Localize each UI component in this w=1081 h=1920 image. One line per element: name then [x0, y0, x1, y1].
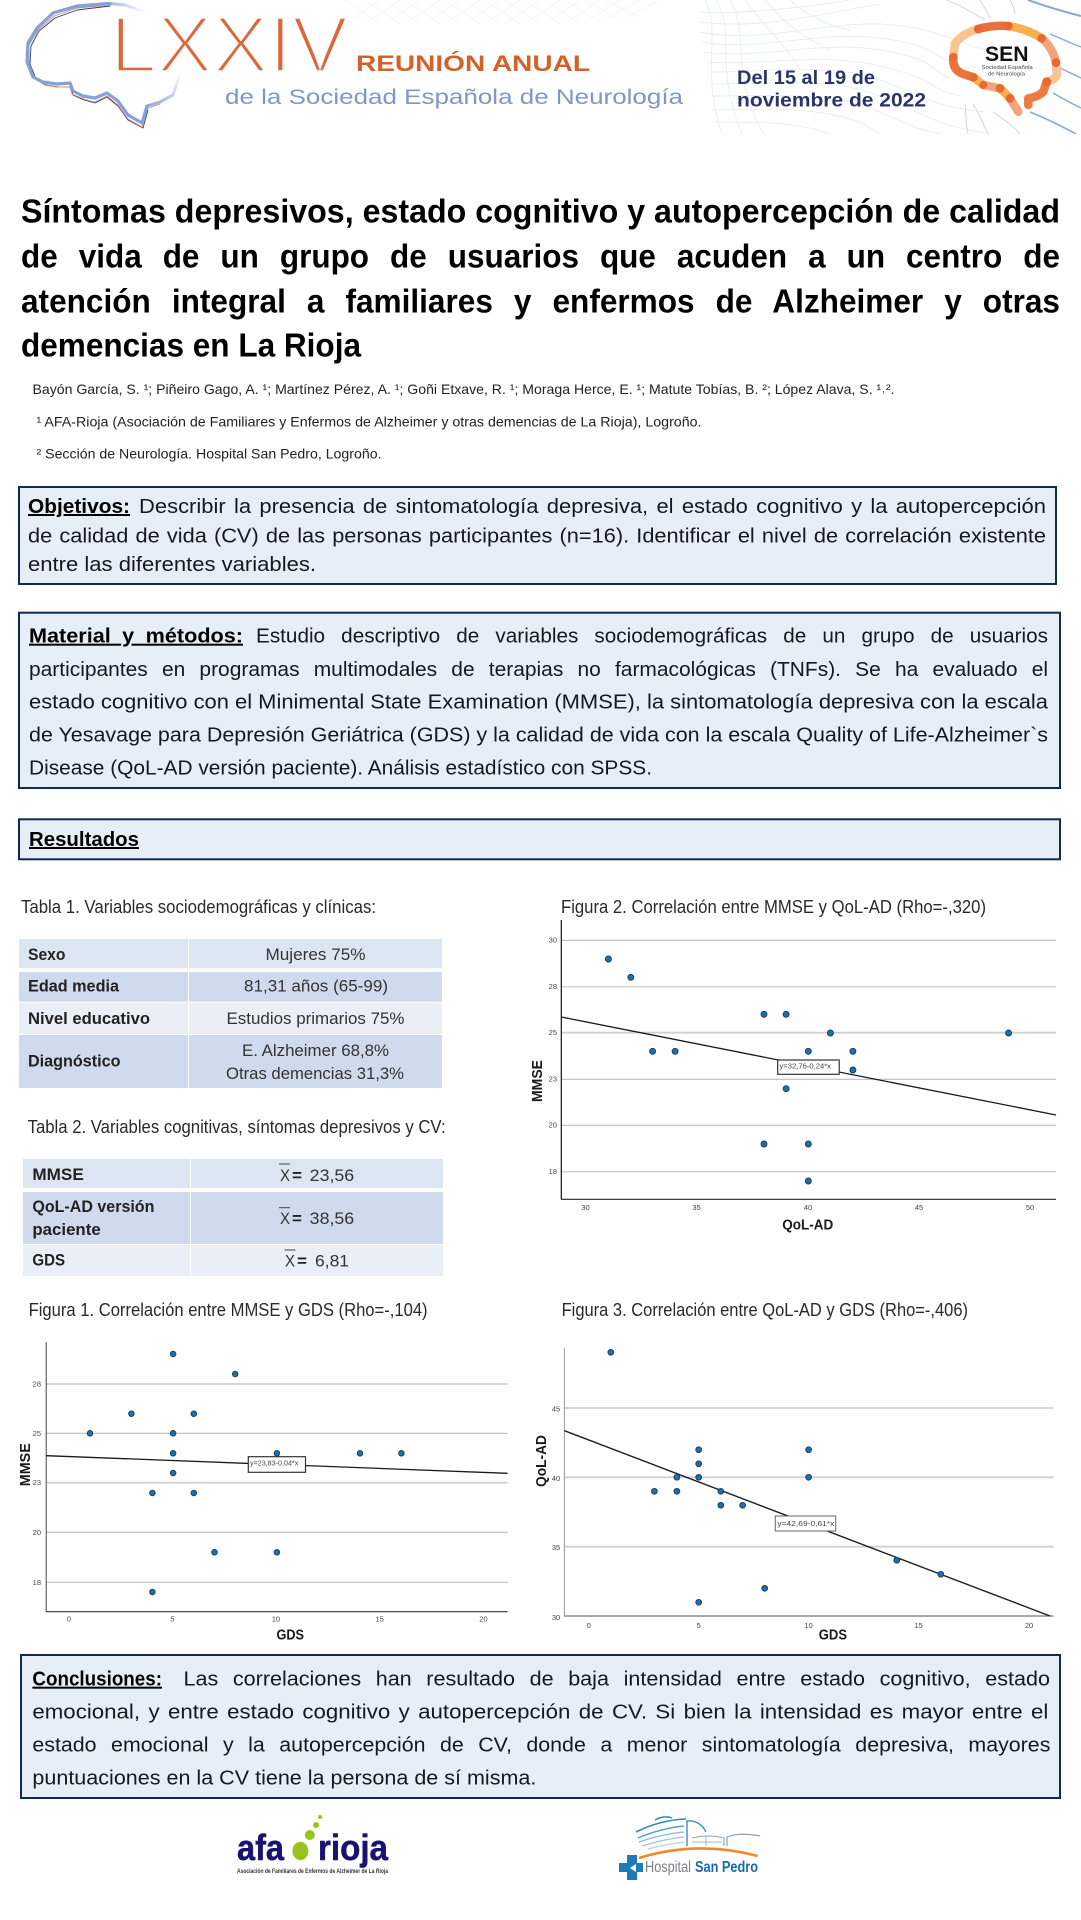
table 2: GDS [32, 1251, 65, 1270]
panel: material y métodos: de Yesavage para Depresión Geriátrica (GDS) y la calidad de vida con la escala Quality of Life-Alzheimer`s [29, 724, 1048, 746]
panel: material y métodos: Material y métodos: [29, 626, 243, 648]
chart: figura 3 scatter: 15 [914, 1621, 923, 1630]
equation label: y=32,76-0,24*x [780, 1062, 831, 1070]
panel: conclusiones: Las correlaciones han resultado de baja intensidad entre estado cognitivo, estado [184, 1669, 1050, 1691]
icon: brain speech outline [27, 4, 180, 128]
chart: figura 2 scatter: 35 [692, 1203, 701, 1212]
panel: resultados heading [19, 819, 1060, 859]
heading: Reunión Anual: REUNIÓN ANUAL [356, 51, 590, 76]
chart: figura 2 scatter: 18 [549, 1167, 557, 1176]
panel: conclusiones: emocional, y entre estado cognitivo y autopercepción de CV. Si bien la intensidad es mayor entre el [32, 1702, 1048, 1724]
table 2: MMSE [32, 1165, 84, 1184]
chart: figura 1 scatter: 0 [67, 1615, 71, 1624]
title: demencias en La Rioja [21, 328, 361, 365]
caption: figura 3: Figura 3. Correlación entre QoL-AD y GDS (Rho=-,406) [562, 1299, 968, 1320]
table 1: E. Alzheimer 68,8% [242, 1041, 389, 1060]
authors and affiliations: ² Sección de Neurología. Hospital San Pedro, Logroño. [36, 446, 382, 462]
chart: figura 2 scatter [530, 920, 1056, 1233]
panel: conclusiones [21, 1655, 1060, 1798]
trend line [564, 1431, 1050, 1616]
data points [605, 956, 1012, 1184]
chart: figura 1 scatter: 25 [33, 1429, 41, 1438]
logo: AFA Rioja: afa [237, 1827, 285, 1868]
chart: figura 3 scatter: 30 [552, 1613, 560, 1622]
data points [608, 1349, 944, 1605]
panel: resultados heading: Resultados [29, 829, 139, 851]
panel: objetivos: de calidad de vida (CV) de las personas participantes (n=16). Identificar el nivel de correlación existente [28, 526, 1046, 548]
panel: conclusiones: puntuaciones en la CV tiene la persona de sí misma. [32, 1767, 536, 1789]
caption: tabla 1: Tabla 1. Variables sociodemográficas y clínicas: [21, 896, 376, 917]
chart: figura 3 scatter: 5 [697, 1621, 701, 1630]
authors and affiliations [32, 381, 894, 462]
table 2: = [292, 1209, 302, 1228]
table 2 [23, 1159, 443, 1276]
logo: Hospital San Pedro: San Pedro [695, 1859, 758, 1876]
x-axis label: QoL-AD [782, 1217, 833, 1233]
table 1: Otras demencias 31,3% [226, 1064, 404, 1083]
logo: Hospital San Pedro: Hospital [645, 1859, 691, 1876]
equation label: y=42,69-0,61*x [777, 1519, 835, 1528]
caption: figura 1: Figura 1. Correlación entre MMSE y GDS (Rho=-,104) [29, 1299, 428, 1320]
chart: figura 2 scatter: 30 [581, 1203, 590, 1212]
table 1: 81,31 años (65-99) [244, 977, 388, 996]
panel: material y métodos: Disease (QoL-AD versión paciente). Análisis estadístico con SPSS. [29, 757, 652, 779]
chart: figura 3 scatter: 10 [804, 1621, 813, 1630]
x-axis label: GDS [819, 1627, 847, 1643]
chart: figura 3 scatter: 0 [587, 1621, 591, 1630]
chart: figura 1 scatter: 5 [170, 1615, 174, 1624]
trend line [561, 1017, 1056, 1115]
chart: figura 1 scatter: 23 [33, 1478, 41, 1487]
chart: figura 1 scatter [18, 1342, 508, 1643]
table 1: Mujeres 75% [266, 945, 366, 964]
table 1: Diagnóstico [28, 1052, 120, 1071]
table 2: = [292, 1166, 302, 1185]
trend line [46, 1456, 508, 1473]
panel: objetivos [19, 487, 1056, 584]
logo: AFA Rioja: Asociación de Familiares de Enfermos de Alzheimer de La Rioja [237, 1869, 389, 1875]
caption: tabla 2: Tabla 2. Variables cognitivas, síntomas depresivos y CV: [28, 1116, 446, 1137]
chart: figura 2 scatter: 20 [549, 1120, 557, 1130]
header banner [27, 0, 1081, 134]
panel: conclusiones: Conclusiones: [32, 1669, 162, 1691]
heading: LXXIV: LXXIV [110, 0, 349, 89]
chart: figura 2 scatter: 30 [549, 936, 557, 944]
x-axis label: GDS [276, 1627, 304, 1643]
dates: Del 15 al 19 de [737, 68, 875, 89]
chart: figura 1 scatter: 18 [33, 1578, 41, 1587]
table 1: Sexo [28, 945, 66, 964]
panel: conclusiones: estado emocional y la autopercepción de CV, donde a menor sintomatología depresiva, mayores [32, 1735, 1050, 1757]
dates [737, 68, 926, 112]
authors and affiliations: ¹ AFA-Rioja (Asociación de Familiares y Enfermos de Alzheimer y otras demencias de La Rioja), Logroño. [36, 414, 702, 430]
y-axis label: MMSE [18, 1443, 34, 1486]
icon: SEN logo: Sociedad Española [982, 65, 1034, 71]
panel: material y métodos: estado cognitivo con el Minimental State Examination (MMSE), la sintomatología depresiva con la escala [29, 691, 1049, 713]
chart: figura 3 scatter: 40 [552, 1474, 560, 1483]
table 2: = [297, 1252, 307, 1271]
dates: noviembre de 2022 [737, 91, 926, 112]
panel: objetivos: entre las diferentes variables. [28, 554, 316, 576]
chart: figura 1 scatter: 15 [376, 1615, 384, 1624]
chart: figura 2 scatter: 50 [1026, 1203, 1034, 1212]
title [21, 194, 1060, 365]
logo: AFA Rioja [237, 1815, 389, 1875]
panel: material y métodos: participantes en programas multimodales de terapias no farmacológicas (TNFs). Se ha evaluado el [29, 659, 1048, 681]
chart: figura 2 scatter: 25 [549, 1028, 557, 1037]
table 2: 23,56 [310, 1166, 354, 1185]
chart: figura 3 scatter: 35 [552, 1543, 560, 1552]
authors and affiliations: Bayón García, S. ¹; Piñeiro Gago, A. ¹; Martínez Pérez, A. ¹; Goñi Etxave, R. ¹; Moraga Herce, E. ¹; Matute Tobías, B. ²; López Alava, S. ¹˒². [32, 381, 894, 397]
table 1: Nivel educativo [28, 1009, 150, 1028]
equation label: y=23,83-0,04*x [250, 1459, 299, 1468]
title: Síntomas depresivos, estado cognitivo y autopercepción de calidad [21, 194, 1060, 231]
table 2: QoL-AD versión [32, 1197, 154, 1216]
icon: SEN logo: SEN [985, 42, 1028, 66]
chart: figura 1 scatter: 28 [33, 1380, 41, 1388]
panel: objetivos: Describir la presencia de sintomatología depresiva, el estado cognitivo y la autopercepción [139, 496, 1046, 518]
panel: material y métodos: Estudio descriptivo de variables sociodemográficas de un grupo de usuarios [256, 626, 1048, 648]
chart: figura 2 scatter: 45 [915, 1203, 923, 1212]
table 2: X [280, 1209, 290, 1228]
chart: figura 3 scatter: 45 [552, 1405, 560, 1414]
chart: figura 1 scatter: 10 [272, 1615, 280, 1624]
chart: figura 1 scatter: 20 [479, 1615, 488, 1624]
data points [87, 1351, 404, 1595]
y-axis label: QoL-AD [534, 1435, 550, 1487]
subheading: society: de la Sociedad Española de Neurología [225, 86, 683, 109]
table 2: X [280, 1166, 290, 1185]
table 1: Edad media [28, 977, 120, 996]
logo: AFA Rioja: rioja [318, 1827, 389, 1868]
logo: Hospital San Pedro [619, 1817, 760, 1880]
table 1: Estudios primarios 75% [226, 1009, 404, 1028]
chart: figura 3 scatter: 20 [1025, 1621, 1033, 1630]
equation label [778, 1060, 839, 1074]
icon: SEN logo: de Neurología [988, 71, 1026, 77]
equation label [248, 1457, 306, 1472]
icon: SEN logo [949, 22, 1060, 112]
panel: objetivos: Objetivos: [28, 496, 130, 518]
chart: figura 1 scatter: 20 [33, 1528, 41, 1537]
table 2: paciente [32, 1220, 101, 1239]
table 2: X [285, 1252, 295, 1271]
chart: figura 2 scatter: 40 [804, 1203, 812, 1212]
y-axis label: MMSE [530, 1060, 546, 1102]
table 2: 38,56 [310, 1209, 354, 1228]
chart: figura 2 scatter: 23 [549, 1074, 557, 1084]
table 1 [19, 939, 442, 1088]
chart: figura 3 scatter [534, 1348, 1054, 1643]
chart: figura 2 scatter: 28 [549, 982, 557, 991]
panel: material y métodos [19, 613, 1060, 788]
equation label [775, 1516, 836, 1531]
caption: figura 2: Figura 2. Correlación entre MMSE y QoL-AD (Rho=-,320) [561, 896, 986, 917]
table 2: 6,81 [315, 1252, 349, 1271]
